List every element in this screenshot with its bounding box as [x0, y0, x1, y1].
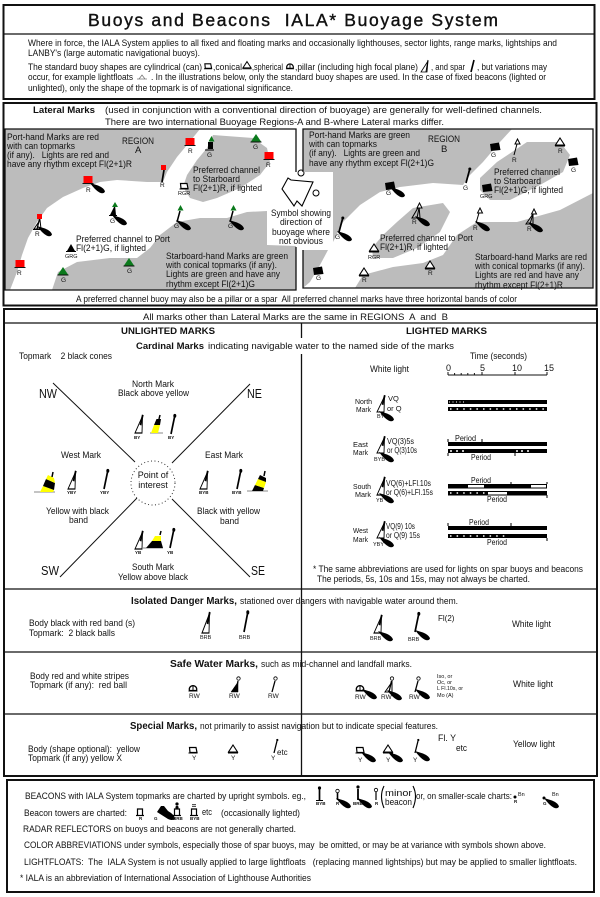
- intro text: ,conical: [213, 62, 242, 72]
- notes: COLOR ABBREVIATIONS under symbols, especially those of spar buoys, may be omitted, or may be at variance with symbols shown above.: [24, 840, 546, 850]
- symbol caption: Symbol showing: [271, 208, 331, 218]
- east mark: East Mark: [205, 450, 243, 460]
- north mark light: North: [355, 397, 372, 406]
- intro text: , and spar: [431, 62, 465, 72]
- beacon symbols: Bn: [518, 792, 525, 798]
- isolated danger marks: BRB: [370, 636, 382, 642]
- west mark light: or Q(9) 15s: [386, 531, 420, 540]
- title: Buoys and Beacons IALA* Buoyage System: [88, 10, 498, 30]
- region A marks: R: [266, 162, 271, 169]
- special marks: Yellow light: [513, 739, 555, 749]
- text: region B starboard-hand: rhythm except Fl(2+1)R: [475, 280, 563, 290]
- south mark light: Period: [487, 495, 507, 504]
- south mark: YB: [135, 550, 142, 555]
- region A marks: R: [17, 270, 22, 277]
- safe water marks: RW: [229, 693, 241, 700]
- notes: LIGHTFLOATS: The IALA System is not usually applied to large lightfloats (replacing manned lightships) but may be applied to smaller lightfloats.: [24, 857, 577, 867]
- isolated danger marks: BRB: [200, 635, 212, 641]
- compass labels: SE: [251, 564, 265, 578]
- special marks: etc: [277, 748, 288, 757]
- safe water light list: [437, 674, 463, 699]
- heading: lighted marks: LIGHTED MARKS: [406, 326, 487, 337]
- intro text: ,pillar (including high focal plane): [295, 62, 418, 72]
- isolated danger marks: Topmark: 2 black balls: [29, 628, 115, 638]
- north mark light: Mark: [356, 405, 371, 414]
- isolated danger marks: Fl(2): [438, 614, 455, 623]
- heading: unlighted marks: UNLIGHTED MARKS: [121, 326, 215, 337]
- special marks: Y: [231, 755, 236, 762]
- beacon symbols: R: [139, 816, 143, 821]
- west mark: Yellow with black: [46, 506, 109, 516]
- north mark light: BY: [377, 414, 385, 420]
- time scale: [370, 351, 554, 375]
- west mark light: Mark: [353, 535, 368, 544]
- region B marks: G: [463, 185, 468, 192]
- notes: RADAR REFLECTORS on buoys and beacons are not generally charted.: [23, 824, 296, 834]
- east mark light: Mark: [353, 448, 368, 457]
- east mark light: or Q(3)10s: [387, 446, 417, 455]
- east mark: Black with yellow: [197, 506, 260, 516]
- south mark: [118, 528, 188, 582]
- text: region A preferred to starboard: to Starboard: [193, 174, 240, 184]
- compass diagram: [34, 379, 268, 582]
- east mark: BYB: [199, 490, 209, 495]
- region A marks: G: [110, 218, 115, 225]
- lateral heading: Lateral Marks: [33, 105, 95, 116]
- compass labels: NW: [39, 387, 57, 401]
- region B marks: RGR: [368, 255, 380, 261]
- panel: header: [4, 5, 594, 99]
- region A marks: R: [160, 182, 165, 189]
- region A marks: RGR: [178, 191, 190, 197]
- west mark light: [353, 518, 547, 548]
- special marks: Y: [271, 755, 276, 762]
- text: region A port-hand: [6, 132, 132, 169]
- intro text: [28, 38, 557, 93]
- text: region B port-hand: with can topmarks: [308, 139, 377, 149]
- region A marks: G: [61, 277, 66, 284]
- time scale: White light: [370, 364, 409, 374]
- time scale: 15: [544, 363, 554, 373]
- beacon symbols: BYB: [316, 801, 326, 806]
- west mark light: Period: [487, 538, 507, 547]
- text: region A preferred to starboard: [193, 165, 262, 193]
- topmark note: Topmark 2 black cones: [19, 351, 112, 361]
- text: region B preferred to port: [380, 233, 473, 252]
- safe water marks: RW: [355, 694, 367, 701]
- region B marks: G: [571, 167, 576, 174]
- compass labels: [39, 387, 265, 578]
- region A marks: [14, 134, 274, 284]
- east mark light: Period: [471, 453, 491, 462]
- safe water light list: L Fl.10s, or: [437, 686, 463, 692]
- region B marks: R: [558, 148, 563, 155]
- safe water marks: Body red and white stripes: [30, 671, 129, 681]
- beacon symbols: [136, 785, 559, 821]
- region A marks: G: [228, 223, 233, 230]
- east mark light: BYB: [374, 457, 385, 463]
- icons: standard buoy shapes: [137, 60, 474, 79]
- safe water marks: RW: [381, 694, 393, 701]
- north mark light: [355, 394, 547, 421]
- lateral heading: (used in conjunction with a conventional direction of buoyage) are generally for well-defined channels.: [105, 105, 542, 116]
- north mark: [118, 379, 189, 440]
- intro text: ,spherical: [252, 62, 283, 72]
- region B marks: R: [527, 226, 532, 233]
- special marks: Y: [386, 757, 391, 764]
- intro text: LANBY's (large automatic navigational buoys).: [28, 48, 200, 58]
- text: region B preferred to port: Fl(2+1)R, if lighted: [380, 242, 448, 252]
- region B marks: G: [491, 152, 496, 159]
- text: region A starboard-hand: rhythm except Fl(2+1)G: [166, 279, 255, 289]
- text: region A starboard-hand: [165, 251, 288, 289]
- text: region B starboard-hand: with conical topmarks (if any).: [474, 261, 585, 271]
- south mark light: VQ(6)+LFl.10s: [386, 479, 431, 488]
- north mark: BY: [168, 435, 174, 440]
- text: region A starboard-hand: with conical topmarks (if any).: [165, 260, 277, 270]
- north mark: BY: [134, 435, 140, 440]
- symbol caption: not obvious: [279, 236, 323, 246]
- safe water marks: such as mid-channel and landfall marks.: [261, 659, 412, 669]
- lateral heading: There are two international Buoyage Regions-A and B-where Lateral marks differ.: [105, 117, 444, 128]
- beacon symbols: G: [543, 801, 547, 806]
- notes: [20, 824, 577, 883]
- east mark: band: [220, 516, 239, 526]
- time scale: 5: [480, 363, 485, 373]
- isolated danger marks: Body black with red band (s): [29, 618, 135, 628]
- time scale: Time (seconds): [470, 351, 527, 361]
- symbol caption: direction of: [280, 217, 322, 227]
- text: region A starboard-hand: Lights are green and have any: [166, 269, 280, 279]
- beacons text: (occasionally lighted): [221, 808, 300, 818]
- panel: marks other than lateral: [4, 309, 597, 776]
- region B marks: G: [386, 190, 391, 197]
- north mark: North Mark: [132, 379, 174, 389]
- map: region B: [303, 129, 593, 290]
- text: region B starboard-hand: [474, 252, 587, 290]
- region B marks: R: [428, 270, 433, 277]
- safe water light list: Oc, or: [437, 680, 452, 686]
- safe water light list: Iso, or: [437, 674, 452, 680]
- special marks: etc: [456, 743, 467, 753]
- section note: All marks other than Lateral Marks are the same in REGIONS A and B: [143, 312, 448, 323]
- intro text: Where in force, the IALA System applies to all fixed and floating marks and occasionally lighthouses, sector lights, range marks, lightships and: [28, 38, 557, 48]
- east mark light: East: [353, 440, 369, 449]
- beacons text: etc: [202, 807, 212, 817]
- region A marks: R: [188, 148, 193, 155]
- text: region A label: [122, 136, 154, 156]
- beacons text: BEACONS with IALA System topmarks are charted by upright symbols. eg.,: [25, 791, 306, 801]
- west mark: West Mark: [61, 450, 101, 460]
- region B marks: R: [473, 225, 478, 232]
- heading: cardinal marks: indicating navigable water to the named side of the marks: [208, 341, 454, 352]
- special marks: Y: [413, 757, 418, 764]
- lighted cardinal marks chart: [313, 351, 583, 584]
- south mark light: South: [353, 482, 371, 491]
- time scale: 10: [512, 363, 522, 373]
- south mark light: Mark: [355, 490, 371, 499]
- beacon symbols: G: [154, 816, 158, 821]
- intro text: . In the illustrations below, only the standard buoy shapes are used. In the case of fixed beacons (lighted or: [151, 72, 546, 82]
- region B marks: R: [362, 277, 367, 284]
- east mark: [197, 450, 268, 526]
- west mark light: West: [353, 526, 369, 535]
- south mark: South Mark: [132, 562, 174, 572]
- special marks: not primarily to assist navigation but to indicate special features.: [200, 721, 438, 731]
- region A marks: G: [207, 152, 212, 159]
- lighted marks note: The periods, 5s, 10s and 15s, may not always be charted.: [317, 574, 530, 584]
- text: region B port-hand: [308, 130, 434, 168]
- safe water marks: RW: [268, 693, 280, 700]
- text: region A label: REGION: [122, 136, 154, 147]
- safe water light list: Mo (A): [437, 693, 454, 699]
- beacons text: Beacon towers are charted:: [24, 808, 127, 818]
- special marks: Topmark (if any) yellow X: [28, 753, 122, 763]
- beacons text: beacon: [385, 797, 412, 807]
- region B marks: R: [412, 219, 417, 226]
- special marks: Fl. Y: [438, 733, 456, 743]
- safe water marks: RW: [189, 693, 201, 700]
- text: region A port-hand: (if any). Lights are red and: [7, 150, 109, 160]
- intro text: , but variations may: [477, 62, 547, 72]
- symbol caption: buoyage where: [272, 227, 330, 237]
- text: region B preferred to starboard: Preferred channel: [494, 167, 560, 177]
- east mark light: VQ(3)5s: [387, 437, 414, 446]
- text: region B preferred to starboard: [494, 167, 563, 195]
- safe water marks: Topmark (if any): red ball: [30, 680, 127, 690]
- panel: beacons and notes: [7, 780, 594, 892]
- north mark light: VQ: [388, 394, 399, 403]
- isolated danger marks: BRB: [239, 635, 251, 641]
- symbol caption: [271, 208, 331, 246]
- west mark light: Period: [469, 518, 489, 527]
- text: region B label: [428, 134, 460, 155]
- region A marks: R: [35, 231, 40, 238]
- text: region A port-hand: have any rhythm except Fl(2+1)R: [7, 159, 132, 169]
- intro text: The standard buoy shapes are cylindrical (can): [28, 62, 202, 72]
- isolated danger marks: stationed over dangers with navigable water around them.: [240, 596, 458, 606]
- special marks: Body (shape optional): yellow: [28, 744, 140, 754]
- beacons text: or, on smaller-scale charts:: [416, 791, 512, 801]
- region B marks: [313, 138, 578, 284]
- isolated danger marks: BRB: [408, 637, 420, 643]
- south mark: YB: [167, 550, 174, 555]
- text: region B preferred to port: Preferred channel to Port: [380, 233, 473, 243]
- west mark light: YBY: [373, 542, 384, 548]
- region A marks: G: [174, 223, 179, 230]
- compass labels: NE: [247, 387, 262, 401]
- west mark: YBY: [100, 490, 109, 495]
- text: region B label: REGION: [428, 134, 460, 145]
- text: region A starboard-hand: Starboard-hand Marks are green: [166, 251, 288, 261]
- text: region B label: B: [441, 144, 447, 155]
- intro text: occur, for example lightfloats: [28, 72, 133, 82]
- special marks: Special Marks,: [130, 721, 197, 732]
- east mark: BYB: [232, 490, 242, 495]
- beacons text: [24, 788, 512, 818]
- beacon symbols: R: [514, 799, 518, 804]
- region A marks: R: [86, 187, 91, 194]
- beacon symbols: BYB: [190, 816, 200, 821]
- compass labels: SW: [41, 564, 59, 578]
- text: region B starboard-hand: Lights are red and have any: [475, 270, 579, 280]
- text: region A preferred to port: Preferred channel to Port: [76, 234, 170, 244]
- north mark: Black above yellow: [118, 388, 189, 398]
- isolated danger marks: Isolated Danger Marks,: [131, 596, 237, 607]
- lateral heading: [33, 105, 542, 128]
- notes: * IALA is an abbreviation of International Association of Lighthouse Authorities: [20, 873, 311, 883]
- region B marks: GRG: [480, 194, 493, 200]
- text: region B preferred to starboard: to Starboard: [494, 176, 541, 186]
- beacons text: minor: [385, 788, 412, 798]
- region B marks: G: [316, 275, 321, 282]
- buoyage direction symbol: [271, 170, 331, 246]
- intro text: unlighted), only the shape of the topmark is of navigational significance.: [28, 83, 293, 93]
- time scale: 0: [446, 363, 451, 373]
- safe water marks: [30, 659, 553, 701]
- south mark light: YB: [376, 498, 384, 504]
- north mark light: or Q: [387, 404, 402, 413]
- south mark light: [353, 476, 547, 504]
- text: region B preferred to starboard: Fl(2+1)G, if lighted: [494, 185, 563, 195]
- text: region B port-hand: (if any). Lights are green and: [309, 148, 420, 158]
- south mark light: or Q(6)+LFl.15s: [386, 488, 433, 497]
- west mark: band: [69, 515, 88, 525]
- heading: cardinal marks: Cardinal Marks: [136, 341, 204, 352]
- text: region B port-hand: Port-hand Marks are green: [309, 130, 410, 140]
- safe water marks: RW: [409, 694, 421, 701]
- text: region A preferred to starboard: Fl(2+1)R, if lighted: [193, 183, 262, 193]
- region A marks: G: [253, 144, 258, 151]
- special marks: [28, 721, 555, 764]
- beacon symbols: R: [336, 801, 340, 806]
- lateral footnote: A preferred channel buoy may also be a pillar or a spar All preferred channel marks have three horizontal bands of color: [76, 294, 517, 304]
- region B marks: R: [512, 157, 517, 164]
- text: region B starboard-hand: Starboard-hand Marks are red: [475, 252, 587, 262]
- safe water marks: Safe Water Marks,: [170, 659, 258, 670]
- special marks: Y: [192, 755, 197, 762]
- west mark: YBY: [67, 490, 76, 495]
- map: region A: [5, 129, 296, 290]
- east mark light: Period: [455, 434, 476, 443]
- safe water marks: White light: [513, 679, 553, 689]
- isolated danger marks: [29, 596, 551, 643]
- beacon symbols: BRB: [173, 816, 183, 821]
- panel: lateral marks: [4, 103, 596, 306]
- compass labels: Point of: [138, 470, 169, 480]
- text: region A port-hand: with can topmarks: [6, 141, 75, 151]
- text: region A label: A: [135, 145, 142, 156]
- west mark: [34, 450, 109, 525]
- compass labels: interest: [138, 480, 168, 490]
- region A marks: GRG: [65, 254, 78, 260]
- region B marks: G: [335, 234, 340, 241]
- region A marks: G: [127, 268, 132, 275]
- beacon symbols: BRB: [353, 801, 363, 806]
- isolated danger marks: White light: [512, 619, 551, 629]
- text: region A port-hand: Port-hand Marks are red: [7, 132, 99, 142]
- text: region A preferred to starboard: Preferred channel: [193, 165, 260, 175]
- west mark light: VQ(9) 10s: [386, 522, 415, 531]
- special marks: Y: [358, 757, 363, 764]
- east mark light: [353, 434, 547, 463]
- text: region A preferred to port: Fl(2+1)G, if lighted: [76, 243, 146, 253]
- text: region B port-hand: have any rhythm except Fl(2+1)G: [309, 158, 434, 168]
- lighted marks note: [313, 564, 583, 584]
- beacon symbols: R: [375, 801, 379, 806]
- south mark: Yellow above black: [118, 572, 188, 582]
- beacon symbols: Bn: [552, 792, 559, 798]
- south mark light: Period: [471, 476, 491, 485]
- lighted marks note: * The same abbreviations are used for lights on spar buoys and beacons: [313, 564, 583, 574]
- text: region A preferred to port: [76, 234, 170, 253]
